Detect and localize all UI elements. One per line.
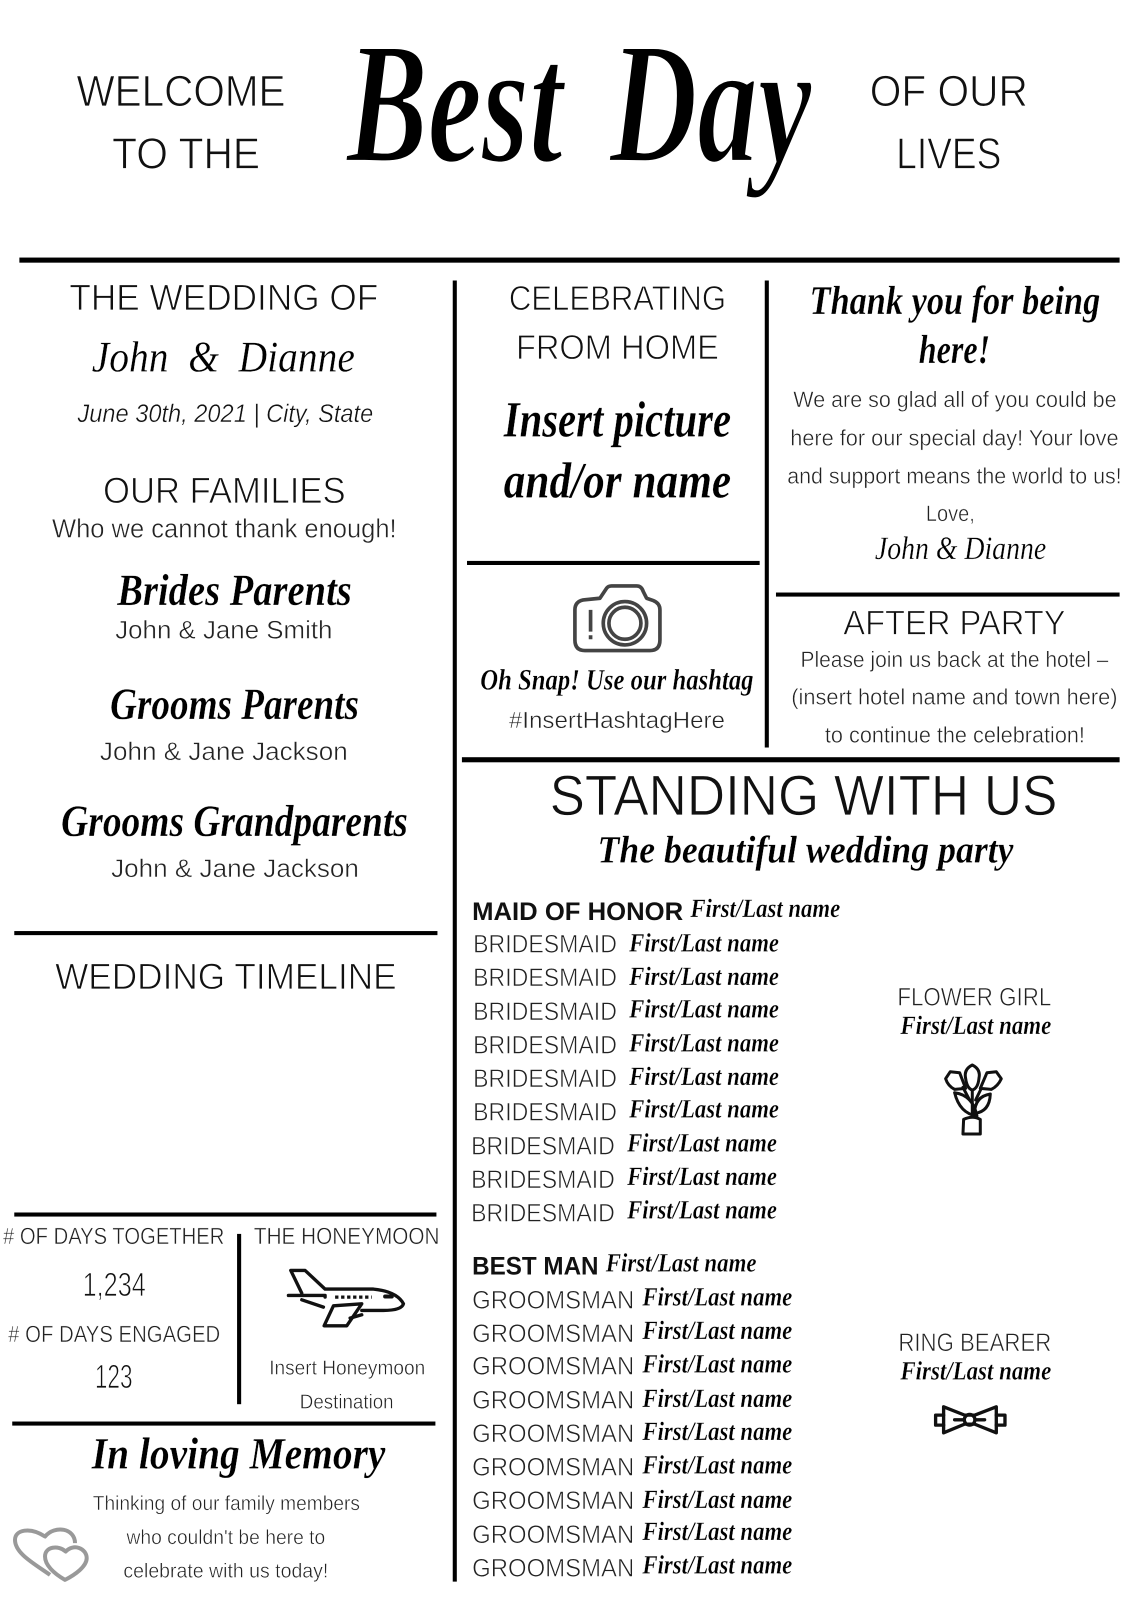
panel: after party <box>791 604 1118 748</box>
panel: standing with us <box>550 763 1057 872</box>
heading: of our lives <box>870 67 1028 179</box>
panel: our families: John & Jane Smith <box>115 616 332 645</box>
panel: standing with us: STANDING WITH US <box>550 763 1057 827</box>
panel: flower girl: First/Last name <box>899 1011 1051 1040</box>
panel: in loving memory: In loving Memory <box>91 1429 386 1479</box>
panel: in loving memory: Thinking of our family members <box>93 1493 360 1515</box>
list: bridesmaids: First/Last name <box>628 928 779 958</box>
panel: hashtag: #InsertHashtagHere <box>509 707 725 733</box>
panel: celebrating from home <box>503 279 731 509</box>
list: bridesmaids: BRIDESMAID <box>473 1031 617 1060</box>
panel: thank you: We are so glad all of you could be <box>793 387 1117 412</box>
heading: welcome to the: WELCOME <box>76 67 286 116</box>
panel: our families: John & Jane Jackson <box>111 855 359 883</box>
title: Best Day: Best <box>345 7 566 199</box>
couple names: John & Dianne <box>92 334 355 381</box>
list: groomsmen: First/Last name <box>642 1550 792 1580</box>
list: bridesmaids <box>471 893 840 1228</box>
list: bridesmaids: First/Last name <box>626 1195 777 1225</box>
list: bridesmaids: BRIDESMAID <box>471 1132 615 1160</box>
panel: thank you <box>787 277 1122 566</box>
heading: OUR FAMILIES <box>103 469 346 511</box>
panel: in loving memory: who couldn't be here to <box>125 1527 325 1549</box>
list: groomsmen: GROOMSMAN <box>472 1453 634 1482</box>
list: bridesmaids: BRIDESMAID <box>473 1098 617 1127</box>
list: groomsmen: GROOMSMAN <box>472 1286 634 1314</box>
panel: days counters <box>3 1223 224 1395</box>
panel: the wedding of <box>69 276 378 428</box>
panel: celebrating from home: and/or name <box>504 452 731 509</box>
list: groomsmen: GROOMSMAN <box>472 1386 634 1414</box>
list: groomsmen: BEST MAN <box>472 1252 599 1281</box>
icon: bouquet <box>946 1065 1001 1134</box>
panel: thank you: Love, <box>926 501 975 526</box>
heading: of our lives: OF OUR <box>870 67 1028 116</box>
panel: days counters: 1,234 <box>83 1266 146 1303</box>
panel: our families <box>52 469 408 883</box>
list: groomsmen: First/Last name <box>642 1516 792 1546</box>
panel: celebrating from home: FROM HOME <box>516 328 719 367</box>
panel: the honeymoon <box>254 1223 439 1413</box>
list: bridesmaids: First/Last name <box>628 1028 779 1057</box>
list: groomsmen: First/Last name <box>642 1282 792 1311</box>
header <box>76 7 1028 199</box>
panel: ring bearer <box>898 1329 1051 1433</box>
list: bridesmaids: BRIDESMAID <box>473 997 617 1026</box>
panel: thank you: here! <box>919 326 990 372</box>
panel: days counters: 123 <box>95 1357 133 1395</box>
panel: standing with us: The beautiful wedding party <box>598 829 1014 872</box>
list: groomsmen <box>472 1248 792 1583</box>
heading: wedding timeline: WEDDING TIMELINE <box>55 956 397 997</box>
title: Best Day <box>345 7 812 199</box>
panel: the honeymoon: Insert Honeymoon <box>269 1357 425 1380</box>
heading: of our lives: LIVES <box>896 130 1001 179</box>
grooms parents: Grooms Parents <box>110 679 359 729</box>
panel: the honeymoon: Destination <box>300 1391 394 1413</box>
heading: welcome to the: TO THE <box>112 130 260 179</box>
list: bridesmaids: First/Last name <box>628 994 779 1024</box>
list: bridesmaids: First/Last name <box>628 1062 779 1091</box>
list: groomsmen: First/Last name <box>642 1416 792 1446</box>
icon: hearts <box>15 1529 87 1580</box>
list: groomsmen: First/Last name <box>642 1485 792 1514</box>
panel: after party: (insert hotel name and town here) <box>791 684 1118 710</box>
list: bridesmaids: MAID OF HONOR <box>472 897 683 926</box>
list: groomsmen: GROOMSMAN <box>472 1419 634 1448</box>
icon: airplane <box>288 1270 403 1326</box>
panel: thank you: and support means the world to us! <box>787 463 1122 489</box>
panel: celebrating from home: Insert picture <box>503 391 731 448</box>
panel: in loving memory <box>15 1429 386 1583</box>
grooms grandparents: Grooms Grandparents <box>61 796 408 846</box>
list: groomsmen: GROOMSMAN <box>472 1352 634 1381</box>
panel: thank you: here for our special day! Your love <box>790 425 1119 451</box>
panel: celebrating from home: CELEBRATING <box>509 279 726 318</box>
icon: bow tie <box>936 1407 1005 1433</box>
panel: our families: John & Jane Jackson <box>100 737 348 766</box>
panel: flower girl: FLOWER GIRL <box>897 983 1051 1012</box>
title: Best Day: Day <box>608 7 812 199</box>
panel: ring bearer: First/Last name <box>899 1356 1051 1386</box>
heading: welcome to the <box>76 67 286 179</box>
list: bridesmaids: First/Last name <box>626 1128 777 1157</box>
panel: flower girl <box>897 983 1051 1134</box>
subheading: Who we cannot thank enough! <box>52 513 397 544</box>
list: bridesmaids: First/Last name <box>628 1094 779 1124</box>
panel: the honeymoon: THE HONEYMOON <box>254 1223 439 1249</box>
list: groomsmen: First/Last name <box>642 1315 792 1345</box>
list: bridesmaids: BRIDESMAID <box>473 964 617 992</box>
panel: in loving memory: celebrate with us today! <box>123 1560 328 1583</box>
panel: ring bearer: RING BEARER <box>898 1329 1051 1357</box>
list: bridesmaids: BRIDESMAID <box>473 1065 617 1093</box>
list: groomsmen: First/Last name <box>642 1384 792 1413</box>
panel: thank you: John & Dianne <box>875 529 1046 566</box>
panel: hashtag: Oh Snap! Use our hashtag <box>480 664 754 697</box>
panel: days counters: # OF DAYS ENGAGED <box>8 1321 220 1347</box>
list: bridesmaids: BRIDESMAID <box>471 1166 615 1194</box>
icon: camera <box>575 586 660 651</box>
list: groomsmen: GROOMSMAN <box>472 1487 634 1515</box>
list: groomsmen: First/Last name <box>642 1450 792 1480</box>
date and place: June 30th, 2021 | City, State <box>77 400 373 428</box>
panel: after party: AFTER PARTY <box>843 604 1066 642</box>
list: groomsmen: First/Last name <box>642 1349 792 1379</box>
list: groomsmen: GROOMSMAN <box>472 1520 634 1549</box>
panel: after party: Please join us back at the hotel – <box>800 647 1109 672</box>
list: bridesmaids: BRIDESMAID <box>473 930 617 959</box>
panel: after party: to continue the celebration! <box>825 722 1085 748</box>
list: bridesmaids: First/Last name <box>626 1162 777 1191</box>
list: groomsmen: GROOMSMAN <box>472 1554 634 1583</box>
list: bridesmaids: First/Last name <box>628 962 779 991</box>
list: groomsmen: First/Last name <box>605 1248 757 1278</box>
brides parents: Brides Parents <box>116 565 352 615</box>
panel: days counters: # OF DAYS TOGETHER <box>3 1223 224 1249</box>
list: bridesmaids: BRIDESMAID <box>471 1199 615 1228</box>
list: groomsmen: GROOMSMAN <box>472 1320 634 1348</box>
panel: hashtag <box>480 586 754 733</box>
heading: THE WEDDING OF <box>69 276 378 318</box>
list: bridesmaids: First/Last name <box>689 893 840 923</box>
